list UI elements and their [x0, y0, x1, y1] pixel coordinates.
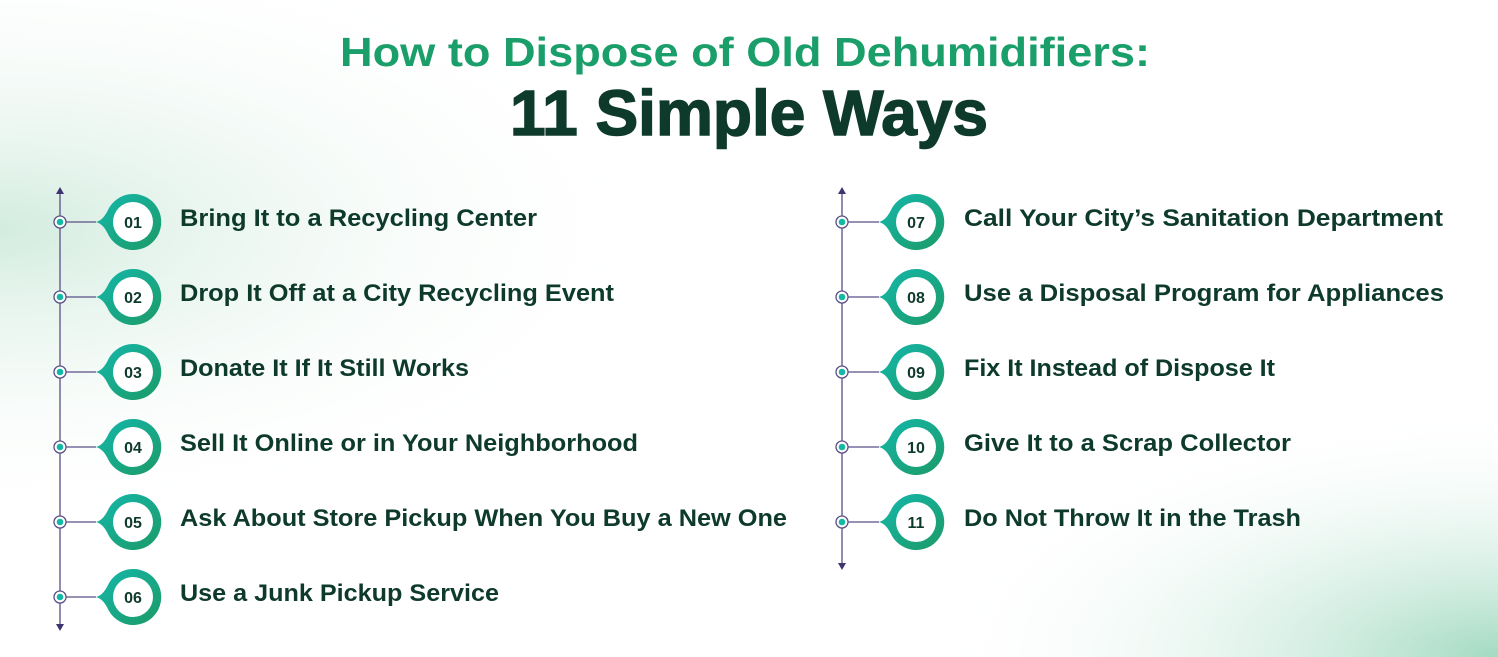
item 07: Call Your City’s Sanitation Department	[964, 205, 1443, 232]
item 10: Give It to a Scrap Collector	[964, 430, 1291, 457]
title: How to Dispose of Old Dehumidifiers:	[340, 29, 1150, 75]
item 01: 01	[124, 215, 142, 232]
title	[340, 29, 1150, 149]
item 04	[54, 419, 638, 475]
item 09: 09	[907, 365, 925, 382]
timeline left	[56, 187, 64, 631]
item 06	[54, 569, 499, 625]
item 03: Donate It If It Still Works	[180, 355, 469, 382]
item 05: 05	[124, 515, 142, 532]
item 02	[54, 269, 614, 325]
item 08	[836, 269, 1444, 325]
item 04: 04	[124, 440, 142, 457]
item 09: Fix It Instead of Dispose It	[964, 355, 1275, 382]
item 11: Do Not Throw It in the Trash	[964, 505, 1301, 532]
item 07: 07	[907, 215, 925, 232]
timeline right	[838, 187, 846, 570]
item 09	[836, 344, 1275, 400]
item 10: 10	[907, 440, 925, 457]
item 10	[836, 419, 1291, 475]
item 11: 11	[908, 515, 925, 532]
item 02: 02	[124, 290, 142, 307]
item 02: Drop It Off at a City Recycling Event	[180, 280, 614, 307]
item 05	[54, 494, 787, 550]
title: 11 Simple Ways	[510, 77, 988, 149]
item 01	[54, 194, 537, 250]
item 04: Sell It Online or in Your Neighborhood	[180, 430, 638, 457]
item 03	[54, 344, 469, 400]
item 11	[836, 494, 1301, 550]
item 03: 03	[124, 365, 142, 382]
item 06: 06	[124, 590, 142, 607]
item 06: Use a Junk Pickup Service	[180, 580, 499, 607]
item 08: 08	[907, 290, 925, 307]
item 01: Bring It to a Recycling Center	[180, 205, 537, 232]
item 05: Ask About Store Pickup When You Buy a New One	[180, 505, 787, 532]
item 07	[836, 194, 1443, 250]
item 08: Use a Disposal Program for Appliances	[964, 280, 1444, 307]
